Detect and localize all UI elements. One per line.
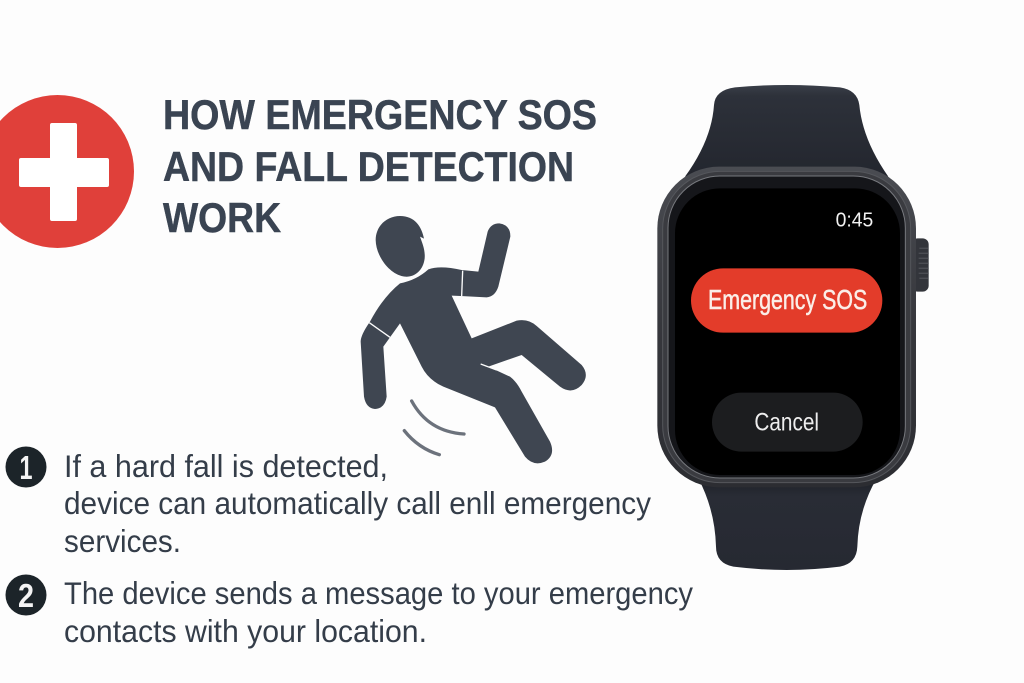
watch case — [657, 167, 916, 487]
icon: falling person — [361, 216, 586, 463]
step 2 text: contacts with your location. — [64, 613, 427, 649]
step 1 text — [64, 448, 651, 559]
cancel button: Cancel — [754, 409, 819, 436]
digital crown — [912, 238, 929, 292]
title: WORK — [163, 194, 281, 241]
step 1 text: If a hard fall is detected, — [64, 448, 388, 484]
emergency SOS button — [691, 268, 882, 333]
badge 2: 2 — [18, 577, 34, 614]
title — [163, 91, 597, 241]
badge 1 — [6, 446, 46, 488]
step 1 text: services. — [64, 523, 181, 559]
step 2 text: The device sends a message to your emergency — [64, 575, 693, 611]
person head — [376, 216, 425, 277]
watch — [657, 85, 929, 570]
step 2 text — [64, 575, 693, 649]
title: HOW EMERGENCY SOS — [163, 91, 597, 138]
step 1 text: device can automatically call enll emergency — [64, 485, 651, 521]
icon: red medical cross — [0, 95, 134, 248]
step 2 — [6, 574, 693, 649]
countdown timer: 0:45 — [836, 210, 873, 232]
badge 1: 1 — [20, 449, 32, 486]
cancel button — [712, 393, 863, 452]
step 1 — [6, 446, 651, 559]
person body — [361, 223, 586, 463]
title: AND FALL DETECTION — [163, 143, 574, 190]
badge 2 — [6, 574, 46, 616]
watch screen — [675, 188, 900, 475]
watch band top — [685, 85, 888, 177]
emergency SOS button: Emergency SOS — [708, 284, 867, 315]
motion lines — [404, 401, 464, 455]
watch band bottom — [698, 478, 877, 570]
